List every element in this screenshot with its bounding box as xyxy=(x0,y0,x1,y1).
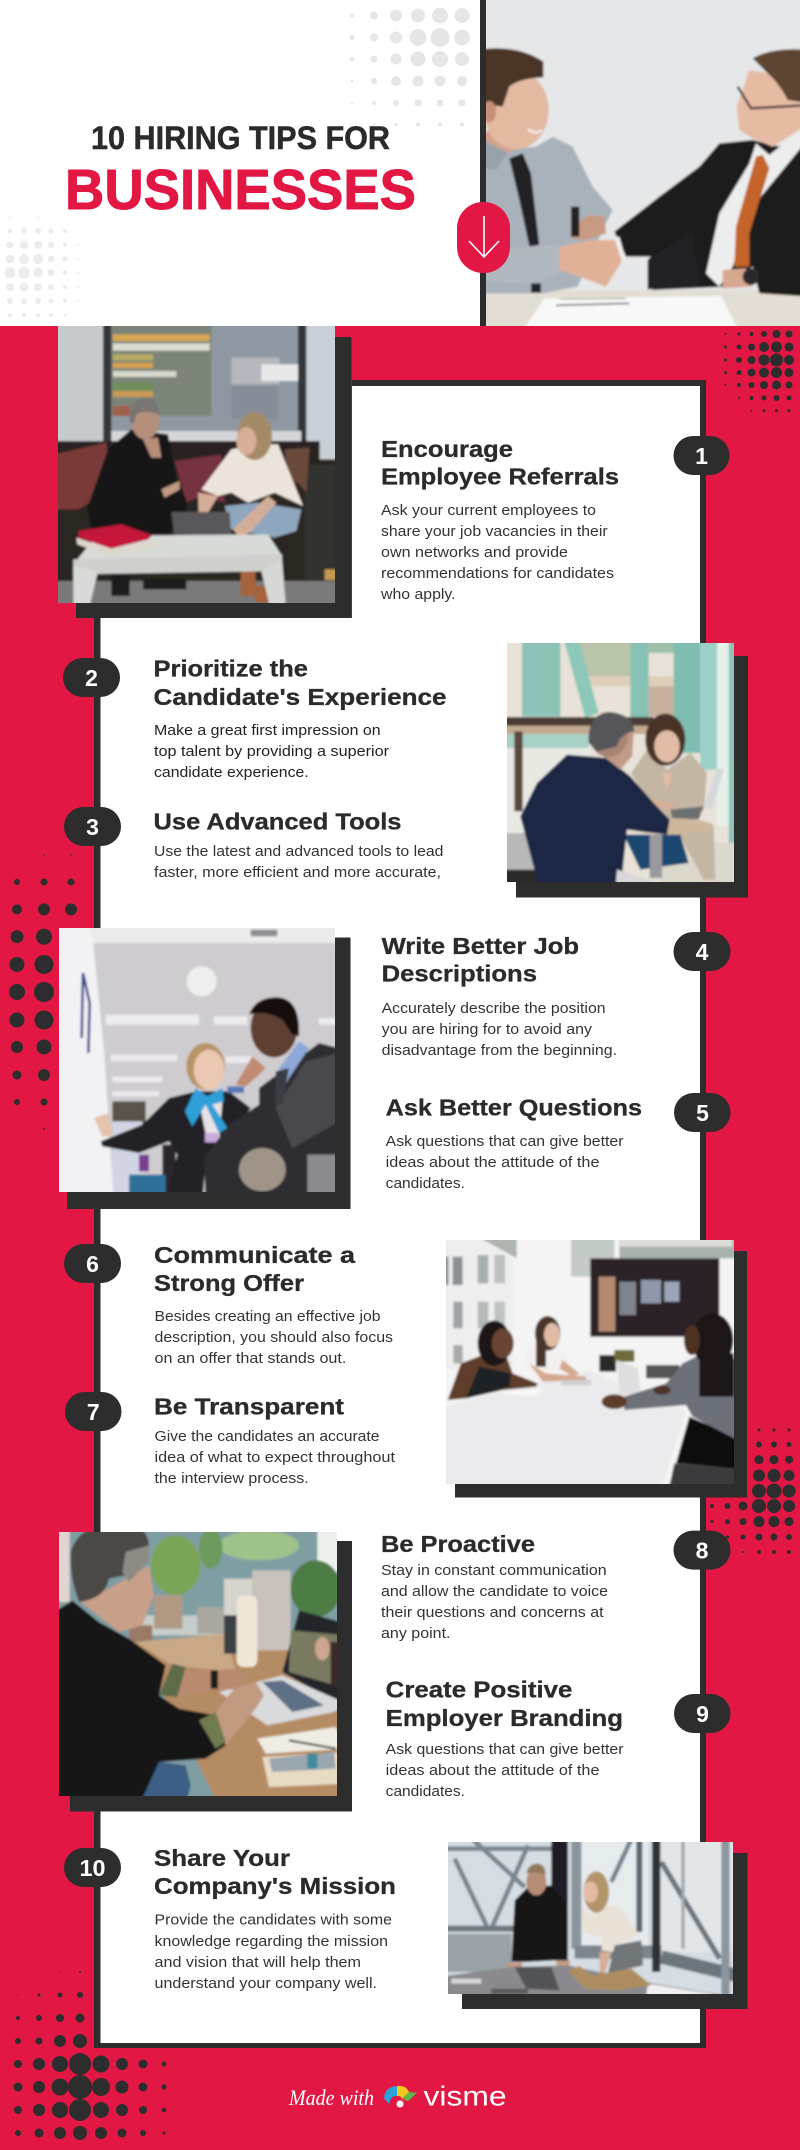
badge 9 xyxy=(674,1694,730,1733)
gray dot pattern left xyxy=(4,216,79,317)
tip 2 text: Make a great first impression on xyxy=(154,722,381,739)
tip 1 text xyxy=(380,436,619,603)
tip 1 text: Ask your current employees to xyxy=(381,502,596,519)
tip 1 text: Employee Referrals xyxy=(381,464,619,490)
badge 1: 1 xyxy=(695,443,708,469)
tip 1 text: own networks and provide xyxy=(381,544,568,561)
badge 4 xyxy=(674,932,730,971)
photo: handshake xyxy=(486,0,800,326)
tip 6 text: Besides creating an effective job xyxy=(154,1308,380,1325)
photo block 6: team at window xyxy=(438,1832,748,2009)
badge 6 xyxy=(64,1244,121,1283)
tip 4 text xyxy=(382,933,617,1059)
tip 1 text: Encourage xyxy=(381,436,513,462)
badge 5: 5 xyxy=(696,1100,709,1126)
tip 2 text: top talent by providing a superior xyxy=(154,743,389,760)
tip 9 text: Create Positive xyxy=(386,1677,572,1703)
tip 5 text xyxy=(386,1094,642,1192)
tip 5 text: ideas about the attitude of the xyxy=(386,1154,600,1171)
badge 6: 6 xyxy=(86,1251,99,1277)
photo block 3: whiteboard discussion xyxy=(49,918,350,1209)
icon: visme logo xyxy=(384,2086,417,2108)
tip 6 text xyxy=(154,1242,393,1367)
tip 10 text: understand your company well. xyxy=(154,1975,377,1992)
tip 8 text: any point. xyxy=(381,1625,450,1642)
badge 5 xyxy=(674,1093,730,1132)
badge 8: 8 xyxy=(696,1538,709,1564)
tip 5 text: Ask questions that can give better xyxy=(386,1133,624,1150)
dots right xyxy=(710,1428,796,1554)
tip 3 text: Use the latest and advanced tools to lead xyxy=(154,843,443,860)
tip 10 text: Provide the candidates with some xyxy=(154,1912,392,1929)
badge 10 xyxy=(64,1848,121,1887)
tip 9 text: candidates. xyxy=(386,1783,465,1800)
tip 1 text: share your job vacancies in their xyxy=(381,523,608,540)
tip 3 text xyxy=(154,808,443,881)
panel: main frame xyxy=(94,380,706,2048)
tip 9 text: Ask questions that can give better xyxy=(386,1741,624,1758)
tip 2 text: Prioritize the xyxy=(154,656,308,682)
tip 10 text: Share Your xyxy=(154,1845,290,1871)
tip 7 text: Give the candidates an accurate xyxy=(154,1428,380,1445)
tip 5 text: candidates. xyxy=(386,1175,465,1192)
dots top right xyxy=(724,330,794,412)
footer: made with visme: Made with xyxy=(288,2085,374,2110)
badge 2: 2 xyxy=(85,665,98,691)
tip 7 text: idea of what to expect throughout xyxy=(154,1449,396,1466)
panel: header xyxy=(0,0,800,337)
tip 4 text: Descriptions xyxy=(382,961,537,987)
photo block 4: conference room xyxy=(436,1230,747,1498)
tip 4 text: Accurately describe the position xyxy=(382,1000,606,1017)
tip 6 text: description, you should also focus xyxy=(154,1329,393,1346)
tip 4 text: disadvantage from the beginning. xyxy=(382,1042,617,1059)
tip 6 text: Strong Offer xyxy=(154,1270,304,1296)
badge 8 xyxy=(674,1531,730,1570)
badge 3: 3 xyxy=(86,814,99,840)
badge 4: 4 xyxy=(696,939,709,965)
badge 2 xyxy=(63,658,120,697)
tip 10 text: knowledge regarding the mission xyxy=(154,1933,388,1950)
tip 2 text xyxy=(154,656,446,781)
tip 8 text: their questions and concerns at xyxy=(381,1604,604,1621)
tip 9 text: ideas about the attitude of the xyxy=(386,1762,600,1779)
dots bottom left xyxy=(14,1971,166,2140)
photo block 2: meeting at cafe xyxy=(497,633,748,898)
title: 10 HIRING TIPS FOR xyxy=(91,120,390,156)
tip 6 text: Communicate a xyxy=(154,1242,355,1268)
tip 9 text: Employer Branding xyxy=(386,1705,623,1731)
badge 9: 9 xyxy=(696,1701,709,1727)
tip 10 text: and vision that will help them xyxy=(154,1954,361,1971)
divider bar xyxy=(480,0,486,326)
tip 7 text: Be Transparent xyxy=(154,1394,344,1420)
tip 8 text: Stay in constant communication xyxy=(381,1562,607,1579)
tip 8 text: Be Proactive xyxy=(381,1531,535,1557)
tip 10 text: Company's Mission xyxy=(154,1873,396,1899)
tip 10 text xyxy=(154,1845,396,1992)
badge 7: 7 xyxy=(87,1399,100,1425)
tip 8 text: and allow the candidate to voice xyxy=(381,1583,608,1600)
tip 5 text: Ask Better Questions xyxy=(386,1094,642,1120)
arrow button xyxy=(457,202,510,273)
photo block 1: team on sofa xyxy=(48,316,352,618)
tip 4 text: you are hiring for to avoid any xyxy=(382,1021,593,1038)
tip 6 text: on an offer that stands out. xyxy=(154,1350,346,1367)
tip 1 text: who apply. xyxy=(380,586,456,603)
photo block 5: video call xyxy=(49,1522,352,1812)
badge 1 xyxy=(674,436,730,475)
title xyxy=(65,120,416,222)
title: BUSINESSES xyxy=(65,158,416,222)
tip 3 text: Use Advanced Tools xyxy=(154,808,402,834)
tip 2 text: candidate experience. xyxy=(154,764,309,781)
tip 7 text xyxy=(154,1394,396,1487)
tip 2 text: Candidate's Experience xyxy=(154,684,446,710)
badge 3 xyxy=(64,807,121,846)
tip 3 text: faster, more efficient and more accurate, xyxy=(154,864,441,881)
badge 10: 10 xyxy=(80,1855,106,1881)
tip 8 text xyxy=(381,1531,608,1642)
tip 9 text xyxy=(386,1677,624,1800)
badge 7 xyxy=(65,1392,122,1431)
tip 1 text: recommendations for candidates xyxy=(381,565,614,582)
gray dot pattern top xyxy=(350,8,470,126)
footer: made with visme: visme xyxy=(424,2081,506,2112)
tip 4 text: Write Better Job xyxy=(382,933,579,959)
tip 7 text: the interview process. xyxy=(154,1470,309,1487)
footer: made with visme xyxy=(288,2081,506,2112)
dots left xyxy=(9,854,77,1130)
